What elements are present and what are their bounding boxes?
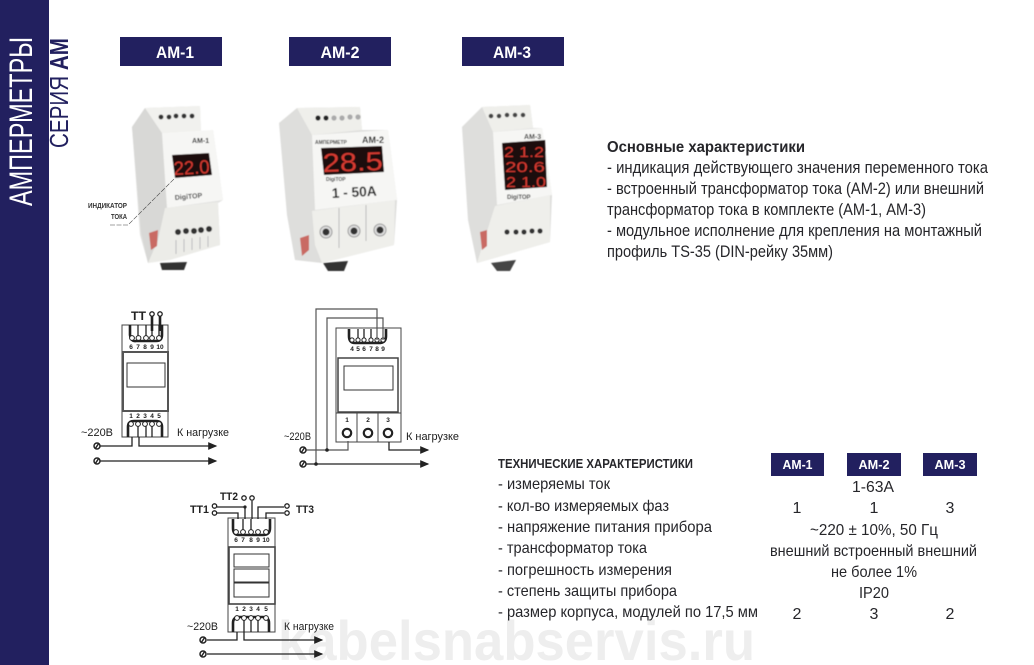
model badge AM-1: АМ-1 [156, 43, 194, 62]
wiring diagram AM-3: ТТ3 [296, 504, 314, 516]
sidebar panel [0, 0, 49, 665]
technical specifications list: - степень защиты прибора [498, 583, 677, 600]
device photo AM-2: АМ-2 [362, 135, 384, 145]
technical specifications list: ТЕХНИЧЕСКИЕ ХАРАКТЕРИСТИКИ [498, 457, 693, 471]
technical specifications list: - размер корпуса, модулей по 17,5 мм [498, 604, 758, 621]
wiring diagram AM-3: ТТ2 [220, 491, 238, 503]
main characteristics text: - индикация действующего значения переменного тока [607, 159, 989, 177]
model badge AM-1 [120, 37, 222, 66]
device photo AM-3: 2 1.0 [506, 174, 546, 191]
wiring diagram AM-1: 7 [136, 344, 140, 351]
wiring diagram AM-1: ТТ [131, 309, 147, 323]
technical specifications list: - измеряемы ток [498, 476, 611, 493]
wiring diagram AM-1: 2 [136, 413, 140, 420]
table values: ~220 ± 10%, 50 Гц [810, 522, 938, 539]
wiring diagram AM-3: ~220В [187, 621, 218, 633]
wiring diagram AM-3: 7 [241, 537, 245, 544]
wiring diagram AM-3: 4 [256, 606, 260, 613]
wiring diagram AM-1: 9 [150, 344, 154, 351]
wiring diagram AM-2: 9 [381, 346, 385, 353]
wiring diagram AM-2: 2 [366, 417, 370, 424]
wiring diagram AM-1 [81, 309, 229, 464]
table values: внешний встроенный внешний [770, 543, 977, 560]
wiring diagram AM-3: 8 [249, 537, 253, 544]
table values: 1 [793, 500, 802, 517]
device photo AM-2 [279, 107, 397, 271]
wiring diagram AM-2: К нагрузке [406, 431, 459, 443]
table header badges: АМ-1 [782, 457, 812, 472]
table values: 3 [946, 500, 955, 517]
wiring diagram AM-1: 5 [157, 413, 161, 420]
table values: не более 1% [831, 564, 917, 581]
device photo AM-1: DigiTOP [175, 193, 203, 202]
device photo AM-3: 2 1.2 [504, 144, 544, 161]
table header badges: АМ-2 [858, 457, 890, 472]
table values: 1 [870, 500, 879, 517]
wiring diagram AM-1: К нагрузке [177, 427, 229, 439]
wiring diagram AM-3: К нагрузке [284, 621, 334, 633]
model badge AM-2 [289, 37, 391, 66]
wiring diagram AM-3: ТТ1 [190, 504, 209, 516]
main characteristics text [607, 139, 989, 261]
device photo AM-1 [132, 106, 223, 270]
model badge AM-3: АМ-3 [493, 43, 531, 62]
device photo AM-2: АМПЕРМЕТР [315, 140, 348, 146]
device photo AM-1: 22.0 [173, 157, 210, 180]
wiring diagram AM-1: 4 [150, 413, 154, 420]
wiring diagram AM-3: 2 [242, 606, 246, 613]
main characteristics text: профиль TS-35 (DIN-рейку 35мм) [607, 243, 833, 261]
device photo AM-1: АМ-1 [192, 138, 209, 145]
device photo AM-3: DigiTOP [507, 195, 531, 201]
device photo AM-2: DigiTOP [326, 177, 346, 183]
device photo AM-3: 20.6 [505, 159, 545, 176]
main characteristics text: Основные характеристики [607, 139, 805, 156]
table header badges [771, 453, 977, 476]
wiring diagram AM-2: 6 [362, 346, 366, 353]
wiring diagram AM-3 [187, 491, 334, 657]
device photo AM-2: 28.5 [322, 146, 383, 178]
table values: 2 [793, 606, 802, 623]
table values: 1-63А [852, 479, 894, 496]
wiring diagram AM-2 [284, 309, 459, 467]
wiring diagram AM-3: 5 [264, 606, 268, 613]
technical specifications list: - трансформатор тока [498, 540, 647, 557]
model badge AM-2: АМ-2 [320, 43, 360, 62]
wiring diagram AM-2: ~220В [284, 431, 311, 443]
callout: current indicator: ТОКА [111, 212, 127, 221]
wiring diagram AM-2: 3 [386, 417, 390, 424]
table values: IP20 [859, 585, 889, 602]
wiring diagram AM-2: 5 [356, 346, 360, 353]
callout: current indicator: ИНДИКАТОР [88, 201, 127, 210]
device photo AM-3: АМ-3 [524, 134, 541, 141]
wiring diagram AM-1: 10 [156, 344, 164, 351]
technical specifications list: - напряжение питания прибора [498, 519, 712, 536]
wiring diagram AM-1: 1 [129, 413, 133, 420]
main characteristics text: трансформатор тока в комплекте (АМ-1, АМ-3) [607, 201, 926, 219]
model badge AM-3 [462, 37, 564, 66]
wiring diagram AM-2: 1 [345, 417, 349, 424]
technical specifications list [498, 457, 758, 621]
callout: current indicator [88, 178, 175, 225]
wiring diagram AM-1: 6 [129, 344, 133, 351]
wiring diagram AM-1: ~220В [81, 427, 113, 439]
wiring diagram AM-2: 4 [350, 346, 354, 353]
wiring diagram AM-3: 6 [234, 537, 238, 544]
wiring diagram AM-3: 10 [262, 537, 270, 544]
wiring diagram AM-3: 1 [235, 606, 239, 613]
sidebar subtitle: СЕРИЯ АМ [44, 38, 74, 148]
main characteristics text: - встроенный трансформатор тока (АМ-2) или внешний [607, 180, 984, 198]
wiring diagram AM-3: 3 [249, 606, 253, 613]
technical specifications list: - погрешность измерения [498, 562, 672, 579]
table values [770, 479, 977, 623]
wiring diagram AM-2: 7 [369, 346, 373, 353]
table values: 2 [946, 606, 955, 623]
device photo AM-2: 1 - 50A [331, 183, 377, 201]
wiring diagram AM-1: 8 [143, 344, 147, 351]
main characteristics text: - модульное исполнение для крепления на монтажный [607, 222, 982, 240]
device photo AM-3 [462, 105, 552, 271]
table values: 3 [870, 606, 879, 623]
table header badges: АМ-3 [934, 457, 966, 472]
wiring diagram AM-1: 3 [143, 413, 147, 420]
wiring diagram AM-3: 9 [256, 537, 260, 544]
technical specifications list: - кол-во измеряемых фаз [498, 498, 669, 515]
wiring diagram AM-2: 8 [375, 346, 379, 353]
